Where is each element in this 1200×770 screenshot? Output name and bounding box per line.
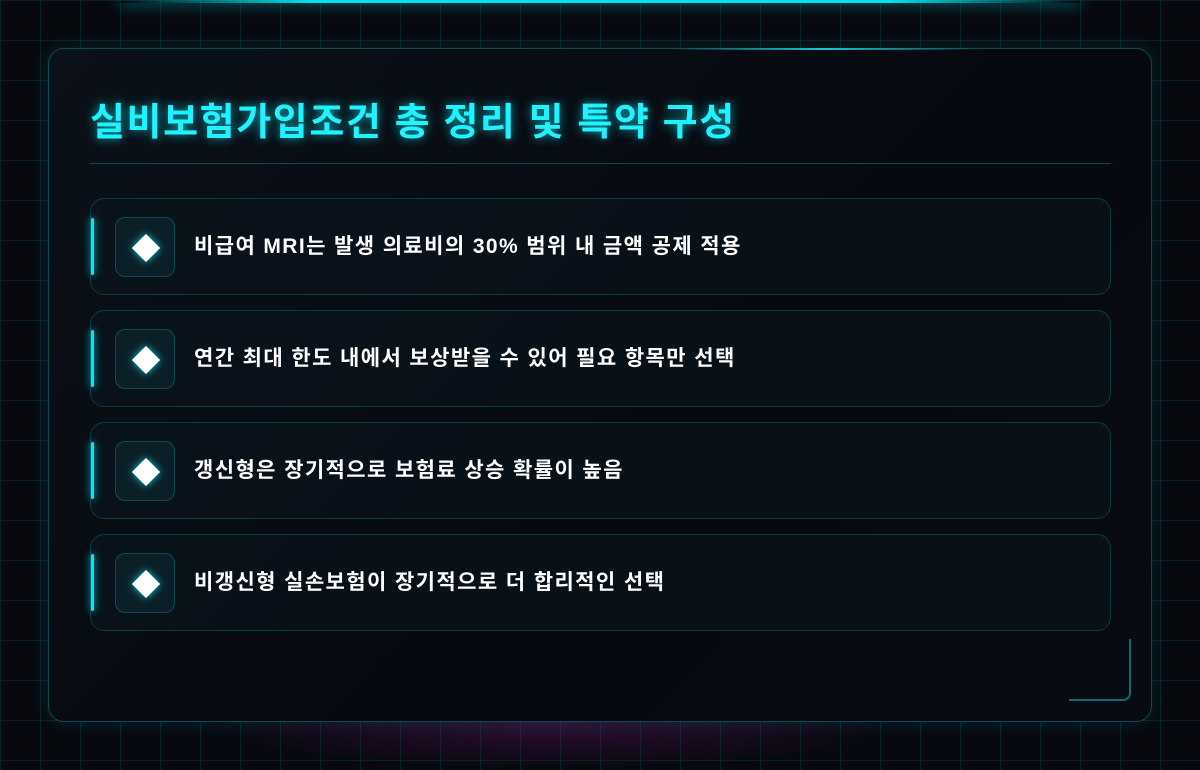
text: 비갱신형 실손보험이 장기적으로 더 합리적인 선택 — [194, 571, 665, 594]
item 4 — [90, 534, 1111, 631]
icon: diamond — [115, 329, 175, 389]
item 1 — [90, 198, 1111, 295]
text: 비급여 MRI는 발생 의료비의 30% 범위 내 금액 공제 적용 — [194, 235, 742, 258]
text: 연간 최대 한도 내에서 보상받을 수 있어 필요 항목만 선택 — [194, 347, 736, 370]
text: 갱신형은 장기적으로 보험료 상승 확률이 높음 — [194, 459, 624, 482]
item 3 — [90, 422, 1111, 519]
icon: diamond — [115, 553, 175, 613]
item 2 — [90, 310, 1111, 407]
title: 실비보험가입조건 총 정리 및 특약 구성 — [90, 102, 736, 144]
icon: diamond — [115, 217, 175, 277]
icon: diamond — [115, 441, 175, 501]
corner accent — [1069, 639, 1131, 701]
